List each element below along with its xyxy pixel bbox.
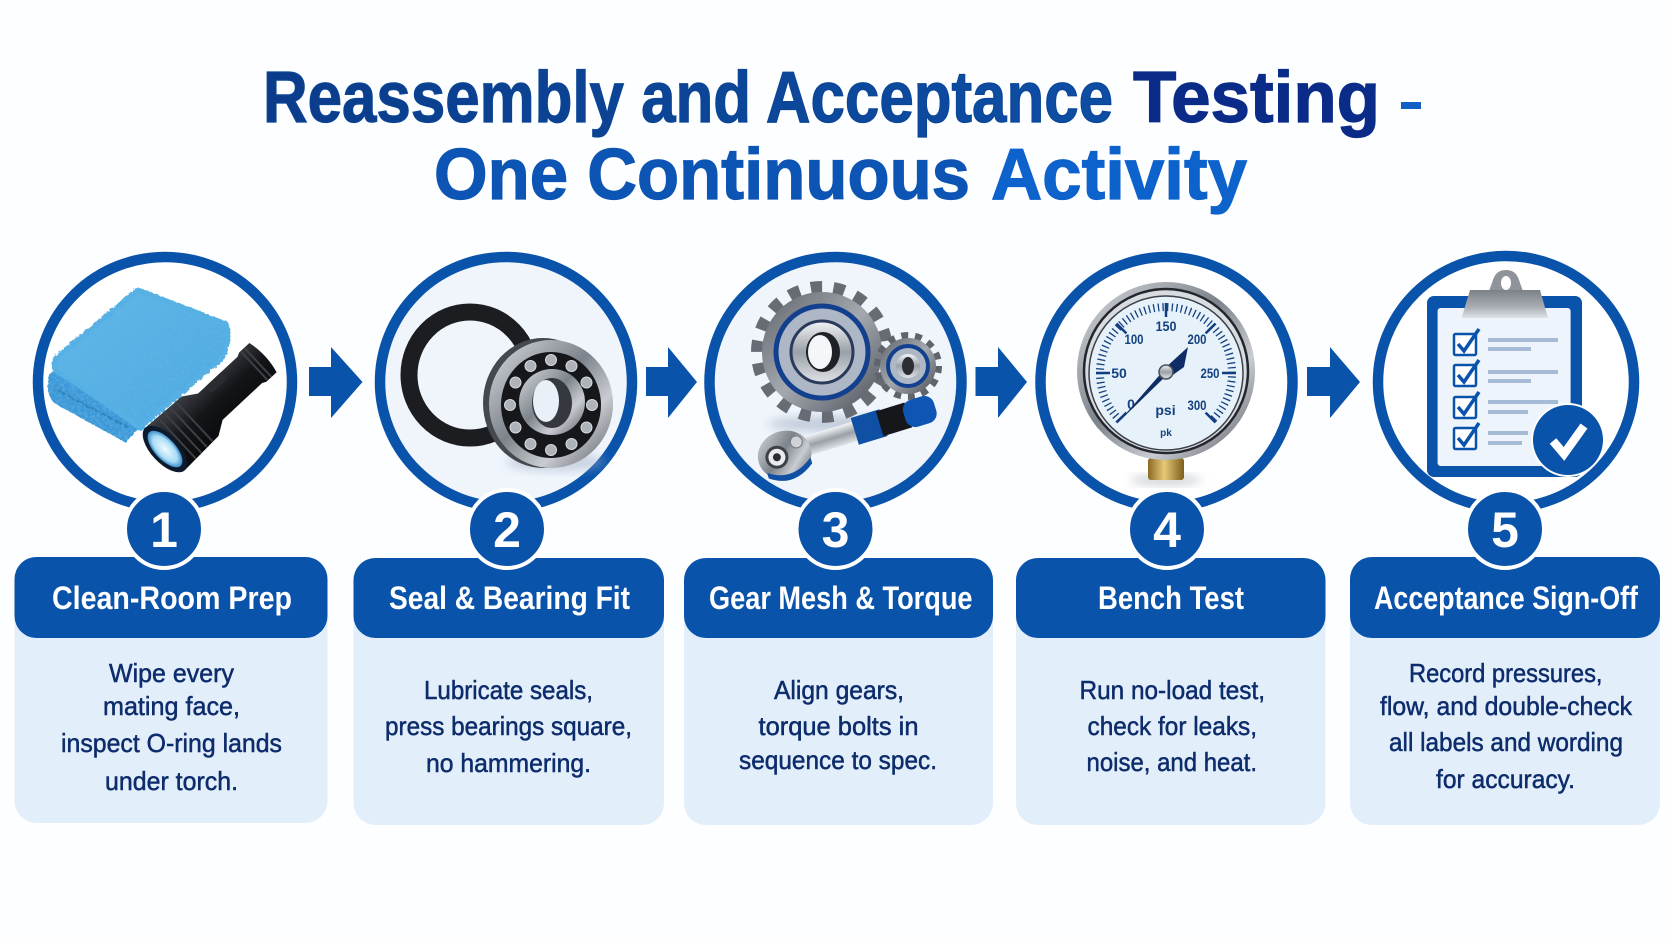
- card 1 body: Wipe every: [109, 658, 234, 688]
- card 3 body: [739, 675, 937, 775]
- number badge 5: 5: [1491, 502, 1519, 558]
- number badge 3: 3: [822, 502, 849, 558]
- card 4 heading: Bench Test: [1098, 580, 1244, 616]
- icon circle 3: [710, 257, 962, 507]
- card 2 header: [354, 558, 664, 638]
- card 5: acceptance sign-off: [1350, 557, 1660, 825]
- card 1 body: [61, 658, 282, 796]
- card 2 body: no hammering.: [426, 748, 591, 778]
- icon: pressure gauge: pk: [1160, 428, 1172, 439]
- check badge: [1531, 403, 1605, 477]
- card 1 body: mating face,: [103, 691, 240, 721]
- card 3 body: torque bolts in: [758, 711, 918, 741]
- card 4 body: check for leaks,: [1088, 711, 1257, 741]
- title line 1: Reassembly and Acceptance: [263, 58, 1113, 138]
- icon: large gear: [758, 288, 892, 432]
- card 3 body: sequence to spec.: [739, 745, 937, 775]
- clipboard clip: [1462, 270, 1548, 318]
- icon: pressure gauge: 300: [1188, 397, 1207, 413]
- card 4 body: [1080, 675, 1265, 777]
- icon circle 1: [38, 257, 292, 507]
- title line 2: Activity: [991, 135, 1247, 215]
- number badge 4: 4: [1153, 502, 1181, 558]
- icon: pressure gauge: psi: [1155, 402, 1176, 418]
- icon: pressure gauge: 0: [1127, 396, 1135, 412]
- icon: pressure gauge: 50: [1111, 365, 1127, 381]
- icon: towel: [50, 290, 228, 440]
- step 2: seal and bearing fit: [380, 257, 632, 568]
- title line 1: Testing: [1133, 58, 1380, 138]
- step 5: acceptance sign-off: [1378, 256, 1634, 568]
- number badge 2: 2: [493, 502, 521, 558]
- number badge 4: [1128, 490, 1206, 568]
- card 5 body: Record pressures,: [1409, 658, 1602, 688]
- card 5 body: for accuracy.: [1436, 764, 1575, 794]
- card 4 body: noise, and heat.: [1086, 747, 1257, 777]
- icon circle 2: [380, 257, 632, 507]
- card 4 header: [1016, 558, 1326, 638]
- icon: ball bearing: [483, 338, 613, 471]
- card 2: seal and bearing fit: [354, 558, 664, 825]
- card 2 body: [385, 675, 632, 778]
- icon: pressure gauge: 150: [1156, 318, 1177, 334]
- card 1 header: [14, 557, 328, 638]
- title line 2: One Continuous: [434, 135, 970, 215]
- icon: clipboard: [1427, 270, 1605, 477]
- gauge needle: [1119, 347, 1188, 422]
- icon: ratchet wrench: [752, 386, 943, 487]
- icon circle 5: [1378, 256, 1634, 508]
- card 3 heading: Gear Mesh & Torque: [709, 580, 972, 616]
- card 5 header: [1350, 557, 1660, 638]
- card 4 body: Run no-load test,: [1080, 675, 1265, 705]
- icon: pressure gauge: 250: [1200, 365, 1220, 381]
- step 4: bench test: [1040, 257, 1292, 568]
- card 1 body: inspect O-ring lands: [61, 728, 282, 758]
- number badge 2: [468, 490, 546, 568]
- card 2 body: press bearings square,: [385, 711, 632, 741]
- number badge 5: [1466, 490, 1544, 568]
- card 3 header: [684, 558, 993, 638]
- arrow: step 3 to 4: [976, 347, 1027, 418]
- card 4: bench test: [1016, 558, 1326, 825]
- number badge 1: 1: [150, 502, 178, 558]
- icon: pressure gauge: [1077, 282, 1255, 485]
- title line 2: [434, 135, 1247, 215]
- card 1 body: under torch.: [105, 766, 238, 796]
- card 2 heading: Seal & Bearing Fit: [389, 580, 630, 616]
- arrow: step 2 to 3: [646, 347, 697, 418]
- card 3 body: Align gears,: [774, 675, 904, 705]
- number badge 1: [125, 490, 203, 568]
- card 5 body: flow, and double-check: [1380, 691, 1633, 721]
- card 1 heading: Clean-Room Prep: [52, 580, 292, 616]
- icon: pressure gauge: 200: [1188, 331, 1207, 347]
- card 5 body: all labels and wording: [1389, 727, 1623, 757]
- icon: small gear: [878, 336, 938, 396]
- card 1: clean-room prep: [14, 557, 328, 823]
- arrow: step 1 to 2: [309, 347, 362, 418]
- card 2 body: Lubricate seals,: [424, 675, 593, 705]
- step 3: gear mesh and torque: [710, 257, 962, 568]
- icon: pressure gauge: 100: [1124, 331, 1144, 347]
- icon circle 4: [1040, 257, 1292, 507]
- number badge 3: [796, 490, 874, 568]
- card 5 body: [1380, 658, 1633, 794]
- arrow: step 4 to 5: [1307, 347, 1360, 418]
- step 1: clean-room prep: [38, 257, 292, 568]
- icon: o-ring: [409, 312, 531, 438]
- card 3: gear mesh and torque: [684, 558, 993, 825]
- title: [263, 58, 1421, 215]
- icon: flashlight: [135, 335, 285, 480]
- checklist: [1454, 329, 1558, 449]
